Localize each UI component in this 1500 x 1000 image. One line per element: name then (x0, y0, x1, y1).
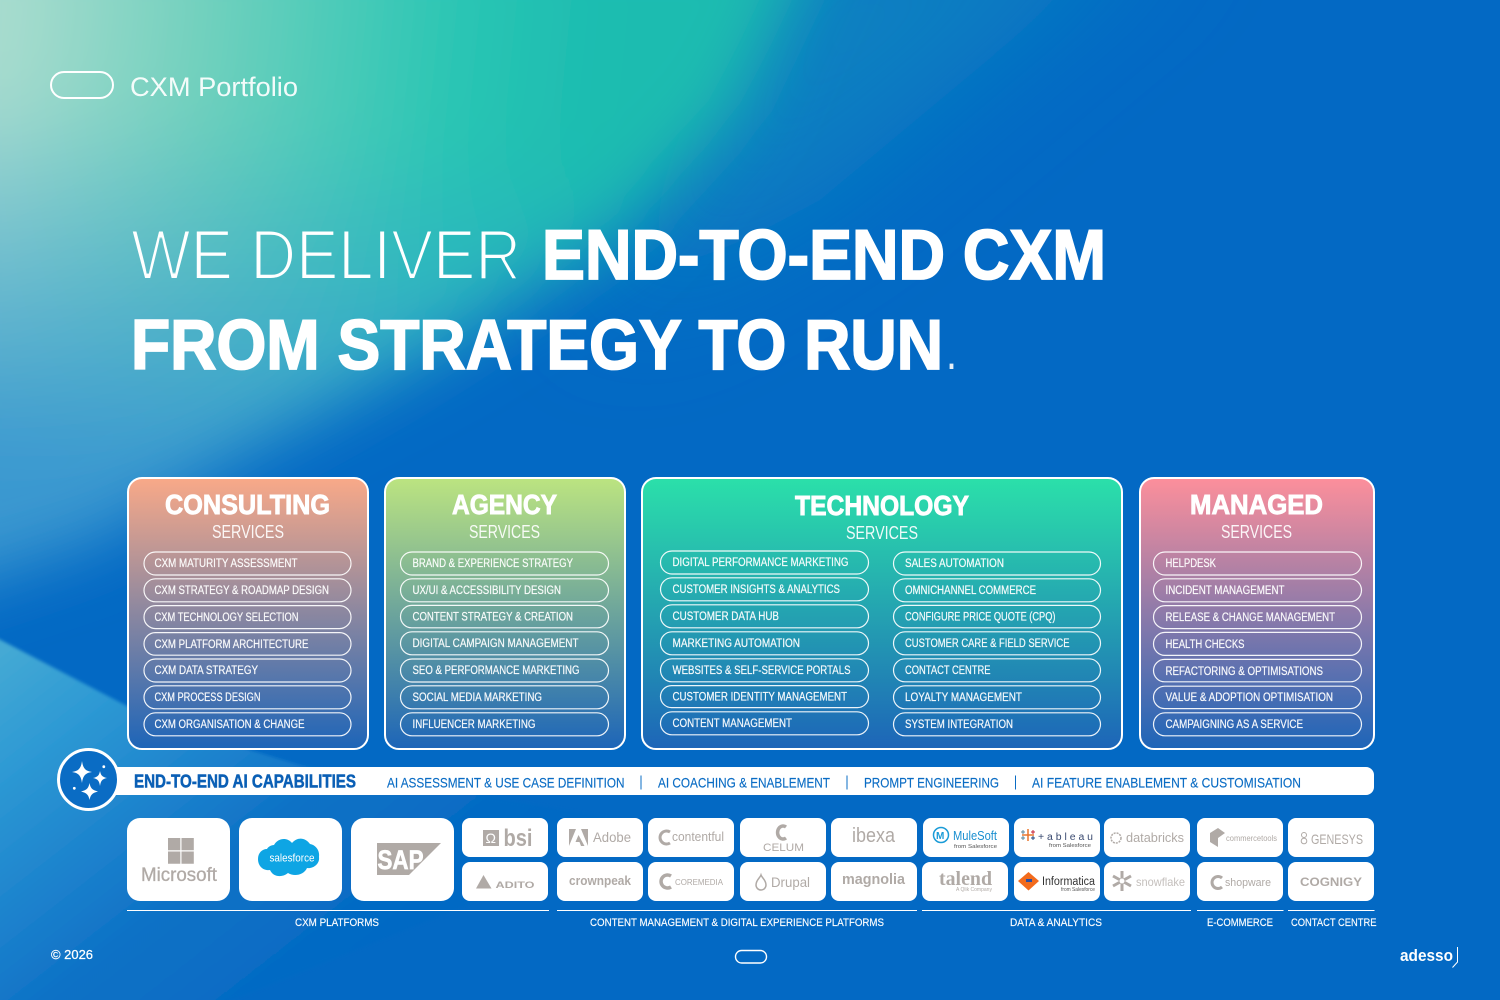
logo tile: COGNIGY (1288, 862, 1374, 901)
item (144, 606, 351, 629)
item (660, 632, 868, 655)
item (1154, 552, 1362, 575)
item (144, 659, 351, 682)
AI item: AI ASSESSMENT & USE CASE DEFINITION (387, 774, 624, 790)
logo tile: shopware: shopware (1225, 877, 1271, 889)
item (400, 579, 608, 602)
logo tile: CoreMedia: COREMEDIA (675, 877, 723, 887)
logo tile: GENESYS: GENESYS (1311, 831, 1363, 847)
item (400, 632, 608, 655)
category: contact centre: CONTACT CENTRE (1291, 917, 1376, 929)
item: CXM STRATEGY & ROADMAP DESIGN (154, 585, 329, 597)
item (1154, 713, 1362, 736)
logo tile: databricks: databricks (1126, 830, 1184, 845)
logo tile: bsi: bsi (504, 825, 532, 852)
title: WE DELIVER (131, 215, 521, 294)
item (894, 552, 1100, 575)
item (660, 712, 868, 735)
panel: agency services (385, 478, 625, 749)
logo tile: magnolia: magnolia (842, 871, 906, 888)
logo tile: ibexa: ibexa (852, 825, 896, 847)
item (144, 579, 351, 602)
logo tile: SAP (351, 818, 454, 901)
item (1154, 686, 1362, 709)
logo tile: SAP: SAP (378, 845, 424, 875)
item: CXM PROCESS DESIGN (154, 692, 260, 704)
subheading: services: SERVICES (846, 522, 918, 543)
copyright: © 2026 (51, 947, 93, 962)
logo tile: Informatica (1014, 862, 1100, 901)
item: RELEASE & CHANGE MANAGEMENT (1166, 612, 1335, 624)
AI item: AI COACHING & ENABLEMENT (658, 774, 830, 790)
logo tile: commercetools: commercetools (1226, 833, 1277, 843)
item (1154, 632, 1362, 655)
logo tile: Adobe: Adobe (593, 829, 631, 845)
logo tile: contentful: contentful (672, 829, 724, 844)
item: DIGITAL CAMPAIGN MANAGEMENT (412, 638, 578, 650)
footer pill (736, 950, 766, 963)
item: CXM TECHNOLOGY SELECTION (154, 612, 298, 624)
logo tile: ibexa (831, 818, 917, 857)
item (144, 686, 351, 709)
logo tile: talend: talend (939, 868, 992, 890)
logo tile: Adobe (557, 818, 643, 857)
item (144, 552, 351, 575)
AI item: AI FEATURE ENABLEMENT & CUSTOMISATION (1032, 774, 1301, 790)
subheading: services: SERVICES (1221, 521, 1292, 542)
logo tile: COGNIGY: COGNIGY (1300, 875, 1362, 889)
logo tile: Informatica: Informatica (1042, 876, 1096, 888)
item (144, 633, 351, 655)
category: content management: CONTENT MANAGEMENT & DIGITAL EXPERIENCE PLATFORMS (590, 917, 884, 929)
item: SALES AUTOMATION (905, 558, 1004, 570)
logo tile: snowflake: snowflake (1136, 875, 1185, 889)
item: CUSTOMER INSIGHTS & ANALYTICS (672, 584, 840, 596)
item: VALUE & ADOPTION OPTIMISATION (1166, 692, 1333, 704)
item: INFLUENCER MARKETING (412, 719, 536, 731)
item: SOCIAL MEDIA MARKETING (412, 692, 542, 704)
title: . (946, 324, 957, 380)
item (400, 713, 608, 736)
logo tile: databricks (1104, 818, 1190, 857)
logo tile: snowflake (1104, 862, 1190, 901)
logo tile: contentful (648, 818, 734, 857)
item: CUSTOMER DATA HUB (672, 611, 779, 623)
item (894, 659, 1100, 682)
item (894, 605, 1100, 628)
logo tile: Salesforce: salesforce (270, 852, 314, 864)
logo tile: MuleSoft: from Salesforce (954, 844, 997, 850)
item: INCIDENT MANAGEMENT (1166, 585, 1284, 597)
item (660, 659, 868, 682)
item: REFACTORING & OPTIMISATIONS (1166, 666, 1323, 678)
item (894, 686, 1100, 709)
logo tile: talend: A Qlik Company (956, 887, 992, 893)
logo tile: tableau (1014, 818, 1100, 857)
panel: technology services (642, 478, 1122, 749)
item: CONFIGURE PRICE QUOTE (CPQ) (905, 611, 1056, 623)
item: CUSTOMER CARE & FIELD SERVICE (905, 638, 1070, 650)
header: CXM Portfolio (51, 72, 298, 102)
item (894, 579, 1100, 602)
item (1154, 579, 1362, 602)
logo tile: MuleSoft: M (936, 831, 944, 842)
item: CONTENT STRATEGY & CREATION (412, 611, 573, 623)
item (660, 578, 868, 601)
logo tile: tableau: + a b l e a u (1038, 832, 1093, 843)
logo tile: Informatica: from Salesforce (1061, 887, 1095, 893)
item: CONTENT MANAGEMENT (672, 718, 792, 730)
panel: consulting services (128, 478, 368, 749)
logo tile: crownpeak (557, 862, 643, 901)
logo tile: commercetools (1197, 818, 1283, 857)
item (894, 713, 1100, 736)
adesso logo: adesso (1400, 946, 1453, 965)
item: CONTACT CENTRE (905, 665, 991, 677)
logo tile: Salesforce (239, 818, 342, 901)
heading: managed: MANAGED (1190, 489, 1323, 520)
item (144, 713, 351, 736)
heading: agency: AGENCY (452, 489, 557, 520)
item (400, 686, 608, 709)
panel: managed services (1140, 478, 1374, 749)
logo tile: Microsoft: Microsoft (141, 865, 218, 886)
item (400, 659, 608, 682)
item (400, 605, 608, 628)
logo tile: GENESYS (1288, 818, 1374, 857)
item: CXM DATA STRATEGY (154, 665, 258, 677)
logo tile: CELUM (740, 818, 826, 857)
logo tile: ADITO (462, 862, 548, 901)
logo tile: crownpeak: crownpeak (569, 873, 632, 888)
AI item: PROMPT ENGINEERING (864, 774, 999, 790)
title: END-TO-END CXM (542, 215, 1106, 294)
logo tile: Microsoft (127, 818, 230, 901)
category: data and analytics: DATA & ANALYTICS (1010, 917, 1102, 929)
item: SEO & PERFORMANCE MARKETING (412, 665, 580, 677)
item: CXM PLATFORM ARCHITECTURE (154, 639, 309, 651)
category: e-commerce (1197, 910, 1284, 929)
AI heading: END-TO-END AI CAPABILITIES (134, 772, 356, 792)
title (131, 215, 1106, 384)
logo tile: Drupal (740, 862, 826, 901)
logo tile: bsi: Ω (486, 830, 496, 846)
item: OMNICHANNEL COMMERCE (905, 585, 1036, 597)
heading: technology: TECHNOLOGY (795, 490, 969, 521)
item: CXM ORGANISATION & CHANGE (154, 719, 305, 731)
logo tile: talend (922, 862, 1008, 901)
category: contact centre (1288, 910, 1376, 929)
logo tile: magnolia (831, 862, 917, 901)
logo tile: MuleSoft (923, 818, 1009, 857)
header: CXM Portfolio: CXM Portfolio (130, 72, 298, 102)
item: CXM MATURITY ASSESSMENT (154, 558, 298, 570)
category: CXM platforms: CXM PLATFORMS (295, 917, 379, 929)
item (1154, 606, 1362, 629)
subheading: services: SERVICES (469, 521, 540, 542)
logo tile: shopware (1197, 862, 1283, 901)
item: CUSTOMER IDENTITY MANAGEMENT (672, 691, 847, 703)
AI capabilities bar (58, 750, 1374, 810)
logo tile: MuleSoft: MuleSoft (953, 828, 997, 843)
item (660, 551, 868, 574)
logo tile: ADITO: ADITO (496, 880, 534, 891)
item (660, 686, 868, 708)
item (400, 552, 608, 575)
item: BRAND & EXPERIENCE STRATEGY (412, 558, 573, 570)
item: DIGITAL PERFORMANCE MARKETING (672, 557, 849, 569)
logo tile: CoreMedia (648, 862, 734, 901)
title: FROM STRATEGY TO RUN (131, 305, 943, 384)
heading: consulting: CONSULTING (165, 489, 330, 520)
logo tile: bsi (462, 818, 548, 857)
subheading: services: SERVICES (212, 521, 284, 542)
logo tile: Drupal: Drupal (771, 874, 810, 890)
icon: AI sparkles (58, 750, 118, 810)
item (1154, 659, 1362, 682)
logo tile: tableau: from Salesforce (1049, 843, 1091, 849)
item: HEALTH CHECKS (1166, 639, 1245, 651)
item (894, 632, 1100, 655)
item: WEBSITES & SELF-SERVICE PORTALS (672, 665, 851, 677)
item: HELPDESK (1166, 558, 1216, 570)
item (660, 605, 868, 628)
item: MARKETING AUTOMATION (672, 638, 800, 650)
category: e-commerce: E-COMMERCE (1207, 917, 1273, 929)
item: UX/UI & ACCESSIBILITY DESIGN (412, 585, 561, 597)
logo tile: CELUM: CELUM (763, 842, 804, 854)
item: LOYALTY MANAGEMENT (905, 692, 1022, 704)
item: SYSTEM INTEGRATION (905, 719, 1013, 731)
item: CAMPAIGNING AS A SERVICE (1166, 719, 1303, 731)
